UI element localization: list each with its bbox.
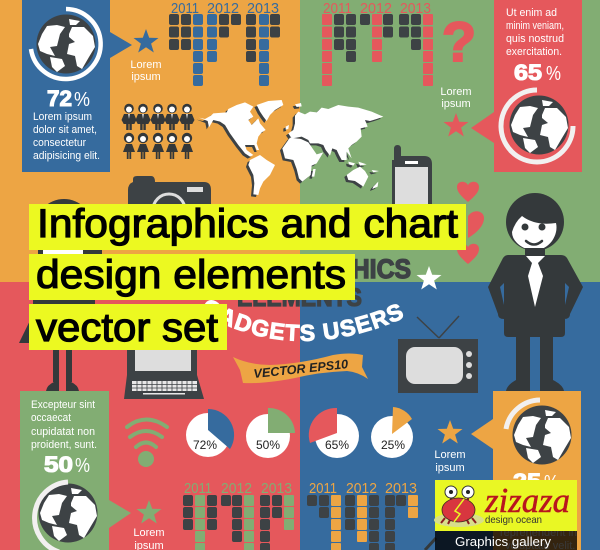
body text: adipisicing elit.: [33, 150, 100, 162]
body text: dolor sit amet,: [33, 124, 97, 136]
background: red quadrant: [0, 282, 300, 550]
icon: camera: [128, 176, 211, 226]
infographic title text: infographics: INFOGRAPHICS: [221, 254, 411, 284]
percentage 50: %: [75, 455, 90, 477]
body text: Lorem ipsum: [33, 111, 92, 123]
percentage 25: %: [544, 472, 559, 494]
chart: pie 65 percent: [309, 408, 359, 458]
chart: blue quadrant year bars: 2012: [346, 480, 377, 497]
chart: blue quadrant year bars: 2013: [385, 480, 417, 497]
label: lorem ipsum green star: Lorem: [133, 527, 165, 539]
percentage 25: [513, 469, 559, 494]
icon: orange star: [438, 420, 462, 444]
background: blue quadrant: [300, 282, 600, 550]
icon: white star: [416, 266, 442, 290]
icon: globe with ring: [501, 90, 573, 162]
body text: exercitation.: [506, 46, 562, 58]
label: lorem ipsum blue star: Lorem: [130, 59, 162, 71]
icon: television: [398, 316, 478, 393]
icon: green star: [136, 500, 162, 524]
chart: green quadrant year bars: 2013: [400, 0, 431, 17]
curved heading: gadgets users: GADGETS USERS: [204, 300, 404, 342]
caption bar: Graphics gallery: [455, 534, 551, 549]
body text: [31, 399, 97, 451]
percentage 50: [44, 452, 90, 477]
body text: quis nostrud: [506, 33, 564, 45]
icon: globe with ring: [31, 9, 101, 79]
ribbon: vector eps10: [233, 354, 368, 383]
caption bar: [435, 531, 577, 550]
chart: green quadrant year bars: 2011: [323, 0, 352, 17]
label: lorem ipsum blue star: ipsum: [131, 71, 161, 83]
chart: red quadrant year bars: 2012: [221, 480, 252, 497]
chart: blue quadrant year bars: 2011: [309, 480, 337, 497]
chart: pie 72 percent: 72%: [193, 438, 217, 452]
chart: green quadrant year bars: 2012: [360, 0, 392, 17]
chart: red quadrant year bars: 2013: [261, 480, 292, 497]
body text: [506, 7, 564, 58]
label: lorem ipsum orange star: Lorem: [434, 449, 466, 461]
icon: person right: [488, 193, 583, 391]
icon: globe with ring: [506, 400, 572, 464]
icon: question mark: ?: [442, 10, 476, 73]
percentage 50: 50: [44, 452, 73, 477]
body text: cupidatat non: [31, 426, 95, 438]
percentage 72: [47, 86, 90, 111]
logo tagline: design ocean: [485, 514, 542, 526]
title line 3: vector set: [36, 306, 218, 350]
icon: red star: [444, 113, 468, 136]
background: orange quadrant: [0, 0, 300, 282]
chart: pie 72 percent: [186, 409, 234, 457]
title line 1: Infographics and chart: [37, 202, 458, 246]
body text: Ut enim ad: [506, 7, 557, 19]
icon: hearts: [457, 182, 484, 264]
chart: pie 65 percent: 65%: [325, 438, 349, 452]
panel: green 50 percent: [20, 391, 131, 550]
logo wordmark: zizaza: [484, 481, 570, 520]
chart: pie 50 percent: 50%: [256, 438, 280, 452]
chart: pie 25 percent: 25%: [381, 438, 405, 452]
panel: red 65 percent: [471, 0, 582, 172]
chart: pie 50 percent: [246, 408, 295, 458]
panel: blue 72 percent: [22, 0, 132, 172]
body text: [33, 111, 100, 162]
chart: green quadrant year bars: [322, 0, 433, 86]
chart: red quadrant year bars: 2011: [184, 480, 212, 497]
background: green quadrant: [300, 0, 600, 282]
percentage 25: 25: [513, 469, 541, 494]
icon: blue star: [134, 29, 158, 52]
label: lorem ipsum red star: Lorem: [440, 86, 472, 98]
infographic title text: elements: ELEMENTS: [237, 284, 362, 312]
body text: Excepteur sint: [31, 399, 95, 411]
chart: orange quadrant year bars: 2012: [207, 0, 239, 17]
chart: red quadrant year bars: [183, 480, 294, 550]
body text: minim veniam,: [506, 20, 564, 32]
percentage 65: 65: [514, 60, 542, 85]
title line 2: design elements: [36, 253, 346, 297]
chart: orange quadrant year bars: [169, 0, 280, 86]
body text: occaecat: [31, 412, 71, 424]
logo: zizaza graphics gallery: [425, 480, 577, 550]
label: lorem ipsum red star: ipsum: [441, 98, 471, 110]
icon: wifi: [127, 420, 167, 467]
chart: orange quadrant year bars: 2013: [247, 0, 279, 17]
icon: person left: [19, 199, 102, 391]
chart: blue quadrant year bars: [307, 480, 418, 550]
people icons: [122, 104, 194, 159]
percentage 72: %: [74, 89, 90, 111]
ribbon: vector eps10: VECTOR EPS10: [253, 357, 349, 381]
percentage 65: %: [546, 63, 561, 85]
body text: consectetur: [33, 137, 86, 149]
label: lorem ipsum orange star: ipsum: [435, 462, 465, 474]
body text: reprehenderit in: [500, 527, 577, 539]
icon: phone: [392, 145, 432, 225]
title banner: [29, 202, 466, 350]
icon: globe with ring: [35, 482, 98, 550]
world map: [197, 100, 383, 197]
icon: laptop: [124, 340, 204, 399]
icon: crab mascot: [434, 486, 484, 527]
panel: orange 25 percent: [471, 391, 581, 550]
percentage 72: 72: [47, 86, 72, 111]
chart: pie 25 percent: [371, 407, 413, 458]
chart: orange quadrant year bars: 2011: [171, 0, 199, 17]
body text: proident, sunt.: [31, 439, 97, 451]
percentage 65: [514, 60, 561, 85]
